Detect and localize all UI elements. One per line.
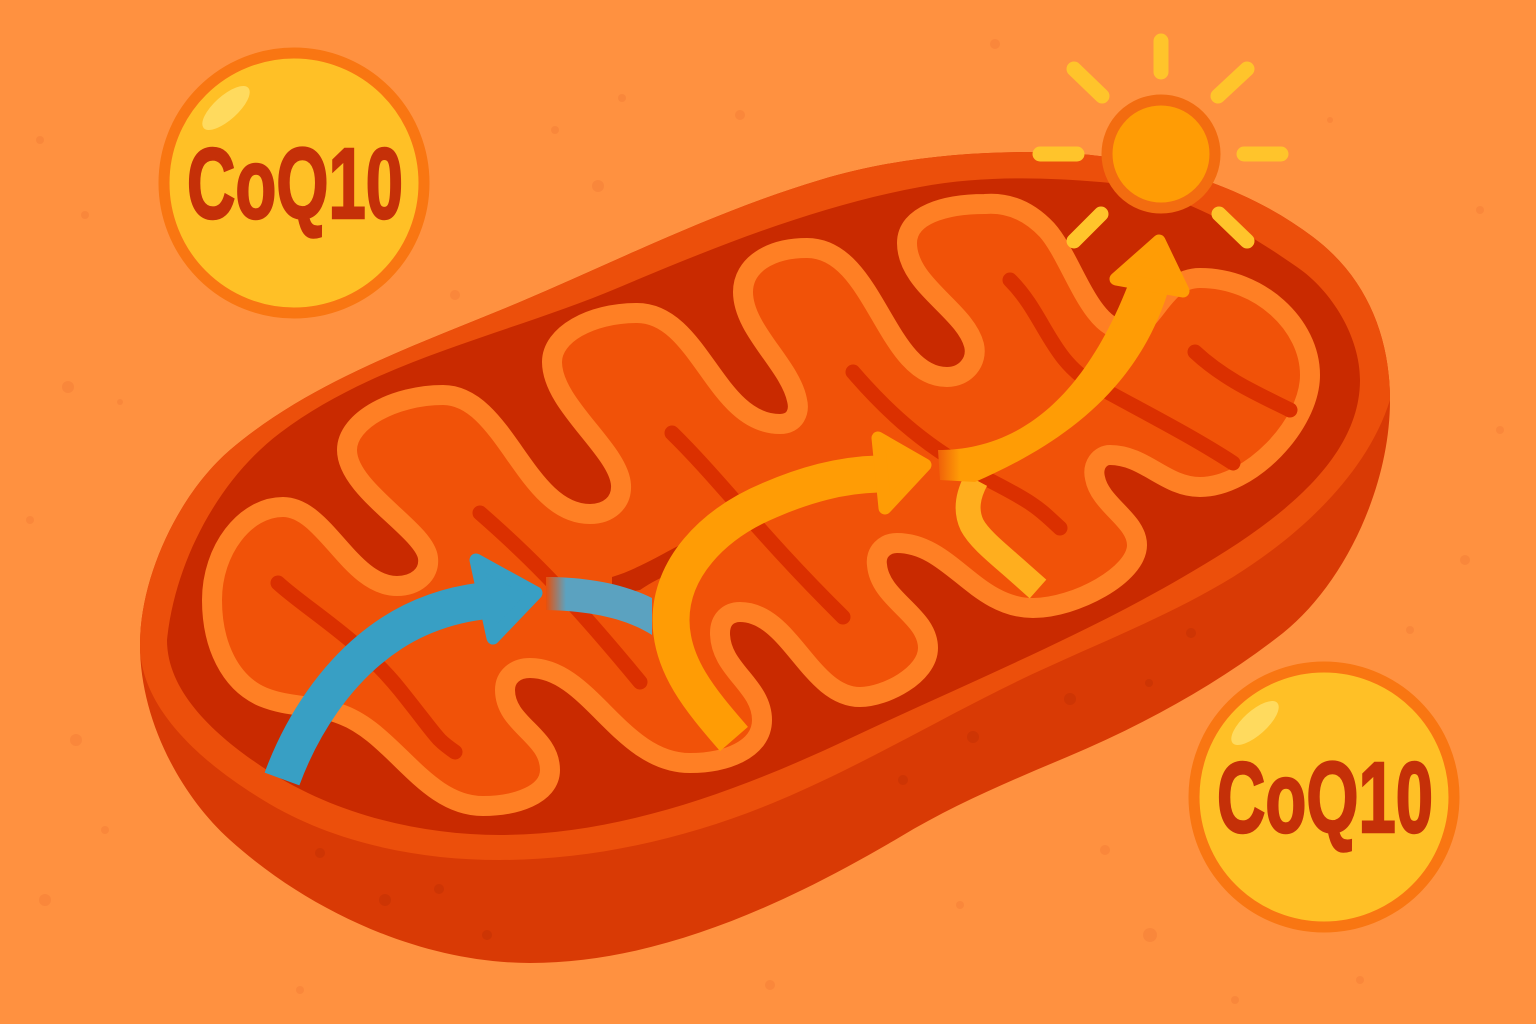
- badge highlight: [196, 79, 256, 137]
- badge: CoQ10 top left: [164, 53, 424, 313]
- badge disc: [164, 53, 424, 313]
- sun disc: [1107, 100, 1215, 208]
- badge label: CoQ10: [187, 128, 403, 240]
- inner membrane with cristae folds: [212, 204, 1310, 806]
- badge: CoQ10 bottom right: [1194, 667, 1454, 927]
- arrow: energy output rising to sun: [938, 241, 1183, 482]
- energy arrow head: [1116, 241, 1183, 291]
- arrow: blue electron path: [282, 560, 536, 779]
- outer membrane rim: [140, 152, 1390, 860]
- badge disc: [1194, 667, 1454, 927]
- arrow: faded blue continuation: [546, 577, 652, 635]
- matrix cavity: [167, 178, 1360, 835]
- energy arrow shaft: [938, 285, 1170, 482]
- orange arrow head: [878, 438, 925, 508]
- sun rays: [1040, 41, 1281, 241]
- inner cristae lines: [278, 280, 1290, 752]
- badge label: CoQ10: [1217, 742, 1433, 854]
- arrow: yellow branch: [968, 480, 1038, 589]
- dark streak behind blue arrow: [612, 545, 680, 595]
- body speckles: [315, 628, 1196, 940]
- icon: sun: [1040, 41, 1281, 241]
- blue arrow shaft: [282, 601, 482, 779]
- blue arrow head: [476, 560, 536, 638]
- outer membrane body: [140, 152, 1390, 963]
- arrow: orange upward path: [671, 438, 925, 739]
- orange arrow shaft: [671, 474, 878, 739]
- badge highlight: [1225, 694, 1285, 752]
